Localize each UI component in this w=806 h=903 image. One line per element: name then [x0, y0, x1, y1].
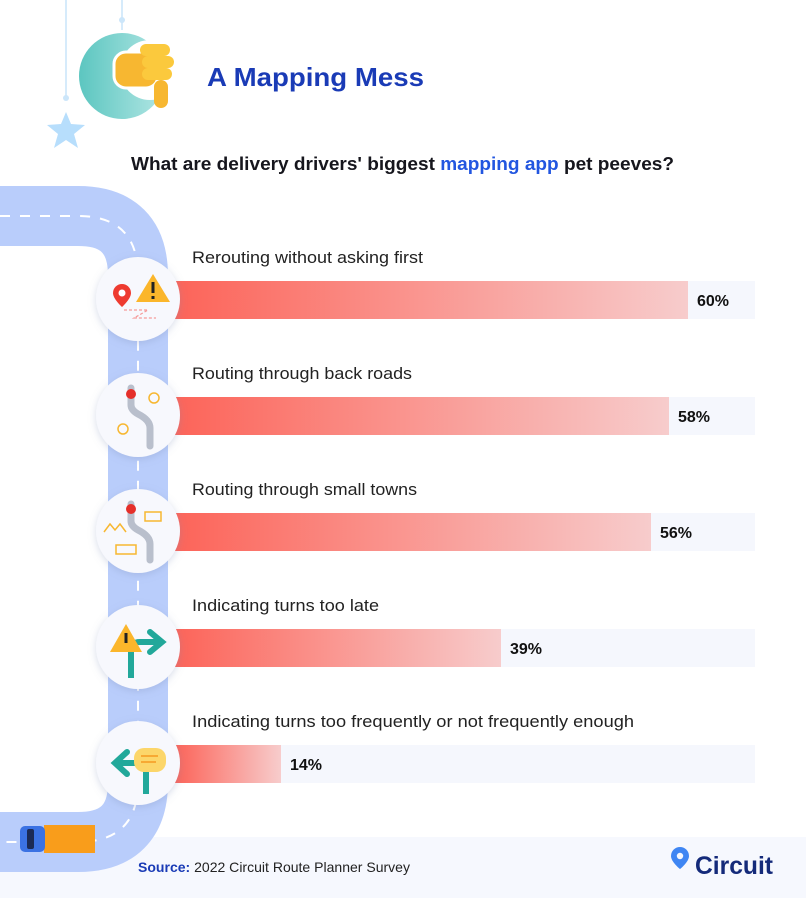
- icon: small towns: [96, 489, 180, 573]
- icon: reroute: [96, 257, 180, 341]
- row 1: [175, 249, 755, 319]
- icon: back roads: [96, 373, 180, 457]
- row 5: 14%: [290, 757, 322, 774]
- subtitle: What are delivery drivers' biggest mapping app pet peeves?: [131, 154, 674, 174]
- row 5: Indicating turns too frequently or not frequently enough: [192, 713, 634, 731]
- row 3: [175, 481, 755, 551]
- row 3: 56%: [660, 525, 692, 542]
- hanging decorations: [47, 0, 125, 148]
- icon: moon with thumbs down: [79, 33, 180, 119]
- row 4: [175, 597, 755, 667]
- row 3: Routing through small towns: [192, 481, 417, 499]
- row 4: 39%: [510, 641, 542, 658]
- row 1: 60%: [697, 293, 729, 310]
- row 5: [175, 713, 755, 783]
- title: A Mapping Mess: [207, 62, 424, 92]
- source: Source: 2022 Circuit Route Planner Survey: [138, 859, 410, 875]
- logo: Circuit: Circuit: [695, 852, 774, 880]
- footer band: [0, 837, 806, 898]
- icon: truck: [20, 825, 95, 853]
- icon: turn late: [96, 605, 180, 689]
- row 2: Routing through back roads: [192, 365, 412, 383]
- row 4: Indicating turns too late: [192, 597, 379, 615]
- row 2: 58%: [678, 409, 710, 426]
- row 1: Rerouting without asking first: [192, 249, 423, 267]
- logo: Circuit: [671, 847, 774, 880]
- road: [0, 216, 138, 842]
- row 2: [175, 365, 755, 435]
- icon: turn frequency: [96, 721, 180, 805]
